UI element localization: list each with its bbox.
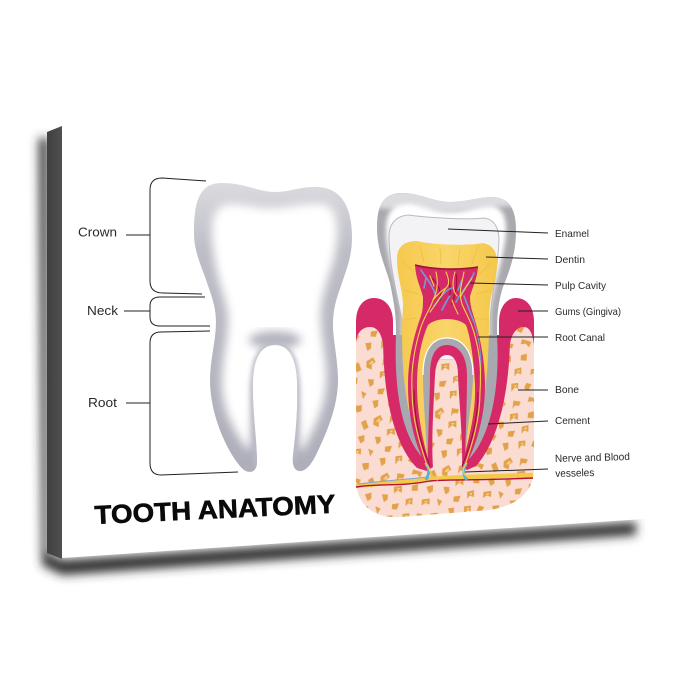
canvas side edge xyxy=(47,126,62,559)
leader lines xyxy=(448,229,548,472)
canvas shadow xyxy=(39,138,636,575)
pulp dark top edge xyxy=(415,265,478,269)
label: crown: Crown xyxy=(78,224,117,240)
root magenta layer xyxy=(383,335,510,471)
nerves and vessels xyxy=(412,270,481,468)
tooth cross-section diagram xyxy=(356,185,534,517)
bracket: neck xyxy=(124,297,210,326)
infographic canvas xyxy=(30,126,644,583)
gums xyxy=(356,298,534,350)
bone block xyxy=(356,327,534,517)
title: TOOTH ANATOMY xyxy=(94,489,336,530)
label: enamel: Enamel xyxy=(555,228,589,240)
label: gums: Gums (Gingiva) xyxy=(555,306,621,318)
label: dentin: Dentin xyxy=(555,254,585,266)
enamel xyxy=(377,193,516,360)
dentin xyxy=(397,241,497,456)
label: bone: Bone xyxy=(555,384,579,396)
label: nerve and blood vessels: vesseles xyxy=(555,467,594,480)
label: nerve and blood vessels xyxy=(555,451,631,480)
root gray layer xyxy=(396,335,498,459)
pulp cavity and root canals xyxy=(408,265,485,465)
label: root: Root xyxy=(88,395,117,410)
bracket: crown xyxy=(126,178,206,294)
label: neck: Neck xyxy=(87,303,119,318)
nerve and blood vessel bundle xyxy=(356,463,533,487)
label: cement: Cement xyxy=(555,415,590,427)
label: root canal: Root Canal xyxy=(555,332,605,344)
whole tooth illustration xyxy=(194,183,352,472)
canvas front xyxy=(62,126,679,558)
label: pulp cavity: Pulp Cavity xyxy=(555,280,607,292)
bracket: root xyxy=(126,331,238,475)
label: nerve and blood vessels: Nerve and Blood xyxy=(555,451,630,465)
